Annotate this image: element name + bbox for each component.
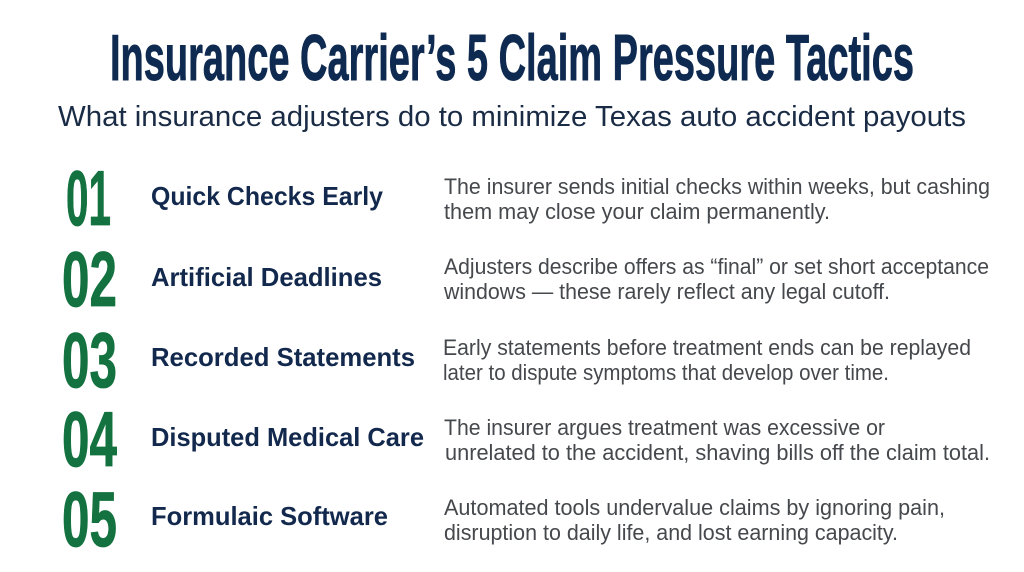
number 01: 01 bbox=[66, 154, 111, 242]
number 02: 02 bbox=[62, 235, 117, 323]
description 2: Adjusters describe offers as “final” or set short acceptance bbox=[444, 254, 989, 279]
description 5: Automated tools undervalue claims by ignoring pain, bbox=[444, 495, 945, 520]
panel: tactic 3 bbox=[62, 316, 971, 404]
description 3: later to dispute symptoms that develop over time. bbox=[443, 360, 889, 385]
number 04: 04 bbox=[62, 395, 117, 483]
description 2 bbox=[443, 254, 989, 304]
description 5 bbox=[444, 495, 945, 545]
heading: artificial deadlines: Artificial Deadlines bbox=[151, 262, 382, 292]
description 4: unrelated to the accident, shaving bills off the claim total. bbox=[445, 440, 990, 465]
number 03: 03 bbox=[62, 316, 117, 404]
number 05: 05 bbox=[62, 475, 117, 563]
description 1 bbox=[444, 174, 990, 224]
description 3 bbox=[443, 335, 971, 385]
panel: tactic 1 bbox=[66, 154, 990, 242]
subtitle: What insurance adjusters do to minimize Texas auto accident payouts bbox=[58, 101, 966, 133]
description 4: The insurer argues treatment was excessive or bbox=[444, 415, 885, 440]
panel: tactic 4 bbox=[62, 395, 990, 483]
description 1: them may close your claim permanently. bbox=[444, 199, 830, 224]
panel: tactic 2 bbox=[62, 235, 989, 323]
heading: quick checks early: Quick Checks Early bbox=[151, 181, 384, 211]
description 2: windows — these rarely reflect any legal cutoff. bbox=[443, 279, 890, 304]
description 4 bbox=[444, 415, 990, 465]
heading: formulaic software: Formulaic Software bbox=[151, 501, 388, 531]
description 3: Early statements before treatment ends can be replayed bbox=[443, 335, 971, 360]
description 1: The insurer sends initial checks within weeks, but cashing bbox=[444, 174, 990, 199]
heading: recorded statements: Recorded Statements bbox=[151, 342, 415, 372]
description 5: disruption to daily life, and lost earning capacity. bbox=[444, 520, 898, 545]
panel: tactic 5 bbox=[62, 475, 945, 563]
heading: disputed medical care: Disputed Medical Care bbox=[151, 422, 424, 452]
